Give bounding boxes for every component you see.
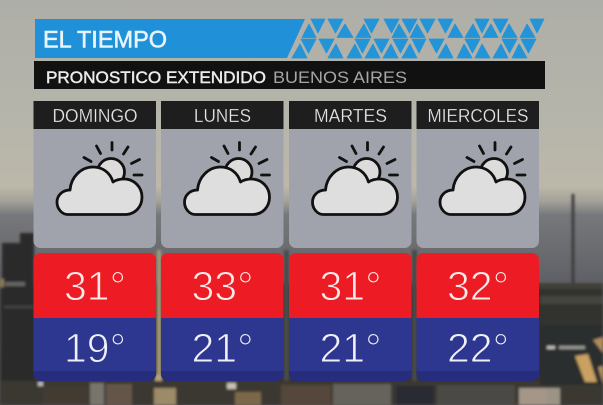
panel: martes bbox=[289, 101, 412, 381]
panel: lunes: LUNES bbox=[194, 106, 251, 126]
panel: domingo: 31° bbox=[64, 263, 126, 309]
icon: sun behind cloud bbox=[440, 142, 525, 214]
header: El Tiempo title band bbox=[35, 19, 305, 58]
panel: martes: MARTES bbox=[314, 106, 387, 126]
subtitle bar bbox=[34, 61, 545, 89]
triangle pattern bbox=[292, 19, 544, 58]
panel: domingo: DOMINGO bbox=[52, 106, 138, 126]
panel: lunes: 21° bbox=[191, 325, 254, 371]
panel: miercoles bbox=[416, 101, 539, 381]
panel: miercoles: 32° bbox=[447, 263, 509, 309]
panel: lunes bbox=[161, 101, 284, 381]
panel: lunes: 33° bbox=[191, 263, 254, 309]
title: EL TIEMPO bbox=[43, 26, 167, 54]
panel: martes: 21° bbox=[319, 325, 382, 371]
subtitle: pronostico extendido: PRONOSTICO EXTENDIDO bbox=[46, 68, 266, 87]
panel: domingo bbox=[34, 101, 156, 381]
panel: miercoles: MIERCOLES bbox=[428, 106, 528, 126]
icon: sun behind cloud bbox=[312, 142, 398, 214]
panel: miercoles: 22° bbox=[447, 325, 509, 371]
icon: sun behind cloud bbox=[184, 142, 270, 214]
panel: martes: 31° bbox=[319, 263, 382, 309]
subtitle: location: BUENOS AIRES bbox=[273, 68, 407, 87]
icon: sun behind cloud bbox=[57, 142, 142, 214]
panel: domingo: 19° bbox=[64, 325, 126, 371]
